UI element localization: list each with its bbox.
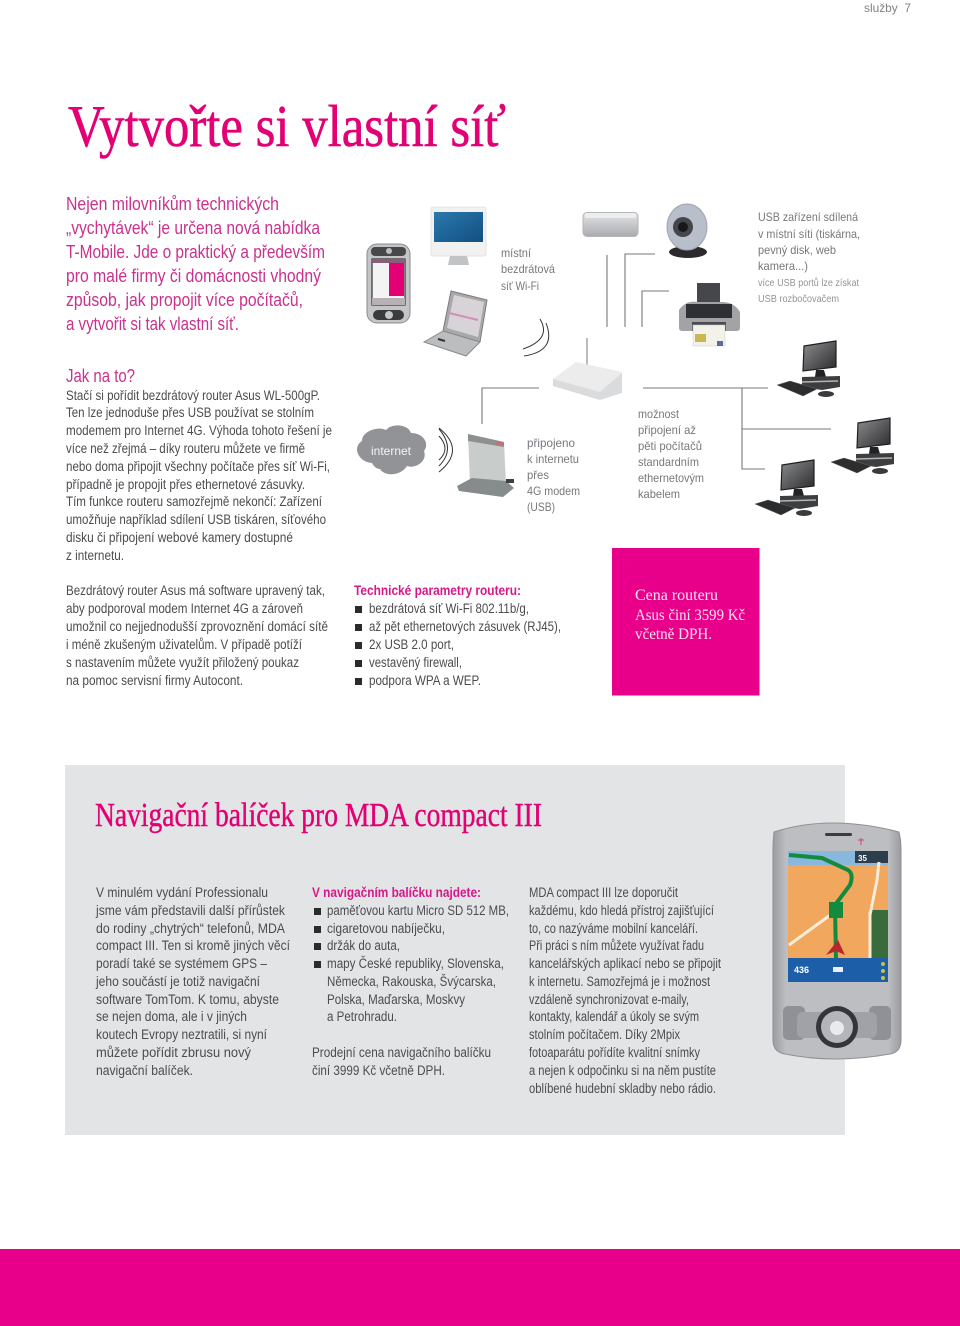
label: shared USB devices: USB rozbočovačem: [758, 293, 839, 305]
text column 2: package contents: cigaretovou nabíječku,: [327, 921, 445, 936]
text column 3: kontakty, kalendář a úkoly se svým: [529, 1009, 699, 1024]
body text: router software: umožnil co nejjednodušší zprovoznění domácí sítě: [66, 619, 328, 634]
label: ethernet connection: možnost: [638, 407, 680, 421]
text column 1: jeho součástí je totiž navigační: [95, 974, 260, 989]
text column 1: navigační balíček.: [96, 1063, 193, 1078]
text column 1: poradí také se systémem GPS –: [96, 956, 267, 971]
text column 2: package contents: mapy České republiky, Slovenska,: [327, 956, 504, 971]
body text: router software: s nastavením můžete využít přiložený poukaz: [66, 655, 299, 670]
body text: router software: Bezdrátový router Asus má software upravený tak,: [66, 583, 325, 598]
text column 3: fotoaparátu pořídíte kvalitní snímky: [529, 1045, 700, 1060]
text column 2: package contents: paměťovou kartu Micro SD 512 MB,: [327, 903, 509, 918]
body text: how it works: modemem pro Internet 4G. Výhoda tohoto řešení je: [66, 423, 332, 438]
network diagram: [357, 204, 894, 516]
body text: how it works: případně je propojit přes ethernetové zásuvky.: [66, 477, 305, 492]
icon: laptop: [424, 291, 487, 356]
panel: technical parameters: bezdrátová síť Wi-Fi 802.11b/g,: [369, 601, 529, 616]
icon: 4G modem on stand: [457, 434, 514, 497]
text column 1: do rodiny „chytrých“ telefonů, MDA: [96, 921, 285, 936]
label: connected via 4G modem: přes: [527, 468, 549, 482]
label: ethernet connection: [638, 407, 704, 501]
text column 1: [95, 885, 290, 1078]
callout: router price: Cena routeru: [635, 587, 718, 604]
label: local wireless network: [501, 246, 555, 293]
text column 2: package contents: Polska, Maďarska, Moskvy: [327, 992, 465, 1007]
icon: Mac mini disk: [583, 212, 638, 236]
icon: printer: [679, 283, 740, 346]
label: shared USB devices: USB zařízení sdílená: [758, 210, 858, 224]
icon: wireless router: [553, 338, 622, 400]
panel: technical parameters: vestavěný firewall,: [369, 655, 462, 670]
body text: how it works: více než zřejmá – díky routeru můžete ve firmě: [66, 441, 305, 456]
callout: router price: Asus činí 3599 Kč: [635, 607, 745, 624]
body text: how it works: nebo doma připojit všechny počítače přes síť Wi-Fi,: [66, 459, 330, 474]
body text: how it works: z internetu.: [66, 548, 124, 563]
label: shared USB devices: pevný disk, web: [758, 243, 836, 257]
text column 3: k internetu. Samozřejmá je i možnost: [529, 974, 710, 989]
text column 2: package contents: Německa, Rakouska, Švýcarska,: [327, 974, 496, 989]
icon: computer 1: [777, 341, 840, 397]
text column 1: můžete pořídit zbrusu nový: [96, 1045, 251, 1060]
label: connected via 4G modem: 4G modem: [527, 484, 580, 498]
connector lines: router to computers: [643, 388, 831, 469]
icon: internet cloud: internet: [371, 444, 412, 458]
body text: router software: i méně zkušeným uživatelům. V případě potíží: [66, 637, 302, 652]
panel: navigation package: [65, 765, 845, 1135]
text column 2: package contents: držák do auta,: [327, 938, 400, 953]
intro text: způsob, jak propojit více počítačů,: [66, 290, 303, 310]
label: ethernet connection: pěti počítačů: [638, 439, 702, 453]
label: local wireless network: místní: [501, 246, 532, 260]
text column 1: V minulém vydání Professionalu: [96, 885, 268, 900]
label: local wireless network: síť Wi-Fi: [501, 279, 539, 293]
label: ethernet connection: kabelem: [638, 487, 680, 501]
body text: router software: aby podporoval modem Internet 4G a zároveň: [66, 601, 303, 616]
callout: router price: včetně DPH.: [635, 626, 712, 643]
icon: computer 3: [755, 460, 818, 516]
icon: web camera: [667, 204, 707, 258]
intro text: pro malé firmy či domácnosti vhodný: [66, 266, 322, 286]
text column 3: Při práci s ním můžete využívat řadu: [529, 938, 704, 953]
text column 3: a nejen k odpočinku si na něm pustíte: [529, 1063, 716, 1078]
label: local wireless network: bezdrátová: [501, 262, 555, 276]
body text: how it works: [66, 388, 332, 563]
text column 3: [529, 885, 721, 1096]
panel: technical parameters: Technické parametry routeru:: [354, 583, 521, 598]
icon: wifi waves: [523, 319, 549, 356]
label: connected via 4G modem: připojeno: [527, 436, 575, 450]
subheading: Jak na to?: Jak na to?: [66, 366, 135, 386]
callout: router price: [612, 548, 760, 696]
page header: section and page number: služby 7: [864, 1, 911, 15]
panel: technical parameters: 2x USB 2.0 port,: [369, 637, 454, 652]
text column 3: kancelářských aplikací nebo se připojit: [529, 956, 721, 971]
intro text: [66, 194, 325, 334]
label: connected via 4G modem: [527, 436, 580, 514]
text column 3: vzdáleně synchronizovat e-maily,: [529, 992, 689, 1007]
text column 3: každému, kdo hledá přístroj zajišťující: [529, 903, 714, 918]
title: Vytvořte si vlastní síť: [68, 93, 506, 159]
panel: technical parameters: [354, 583, 561, 688]
label: shared USB devices: více USB portů lze získat: [758, 277, 859, 289]
body text: how it works: Tím funkce routeru samozřejmě nekončí: Zařízení: [66, 494, 322, 509]
intro text: „vychytávek“ je určena nová nabídka: [66, 218, 321, 238]
text column 1: jsme vám představili další přírůstek: [95, 903, 285, 918]
label: shared USB devices: kamera...): [758, 259, 808, 273]
label: ethernet connection: připojení až: [638, 423, 696, 437]
text column 2: package contents: Prodejní cena navigačního balíčku: [312, 1045, 491, 1060]
text column 3: to, co nazýváme mobilní kanceláří.: [529, 921, 698, 936]
text column 2: package contents: a Petrohradu.: [327, 1009, 397, 1024]
text column 3: stolním počítačem. Díky 2Mpix: [529, 1027, 680, 1042]
icon: MDA compact III phone with navigation: 436: [794, 965, 809, 975]
text column 3: oblíbené hudební skladby nebo rádio.: [529, 1081, 716, 1096]
icon: PDA: [367, 244, 410, 323]
label: ethernet connection: ethernetovým: [638, 471, 704, 485]
text column 1: se nejen doma, ale i v jiných: [96, 1009, 247, 1024]
icon: MDA compact III phone with navigation: 35: [858, 854, 867, 863]
panel: technical parameters: až pět ethernetových zásuvek (RJ45),: [369, 619, 561, 634]
text column 2: package contents: činí 3999 Kč včetně DPH.: [312, 1063, 445, 1078]
label: shared USB devices: [758, 210, 860, 305]
text column 1: koutech Evropy neztratili, si nyní: [96, 1027, 267, 1042]
text column 2: package contents: V navigačním balíčku najdete:: [312, 885, 481, 900]
connector lines: USB devices: [607, 254, 669, 327]
intro text: T-Mobile. Jde o praktický a především: [66, 242, 325, 262]
label: connected via 4G modem: (USB): [527, 500, 555, 514]
intro text: Nejen milovníkům technických: [66, 194, 279, 214]
label: shared USB devices: v místní síti (tiskárna,: [758, 227, 860, 241]
icon: internet cloud: [357, 425, 426, 474]
connector lines: router to modem: [482, 388, 539, 424]
icon: MDA compact III phone with navigation: [773, 823, 901, 1059]
body text: how it works: Ten lze jednoduše přes USB používat se stolním: [66, 405, 314, 420]
panel: technical parameters: podpora WPA a WEP.: [369, 673, 481, 688]
footer band: [0, 1249, 960, 1326]
label: connected via 4G modem: k internetu: [527, 452, 579, 466]
intro text: a vytvořit si tak vlastní síť.: [66, 314, 239, 334]
body text: router software: [66, 583, 328, 688]
body text: how it works: Stačí si pořídit bezdrátový router Asus WL-500gP.: [66, 388, 320, 403]
body text: router software: na pomoc servisní firmy Autocont.: [66, 673, 243, 688]
heading: navigation package: Navigační balíček pro MDA compact III: [95, 797, 542, 834]
icon: computer 2: [831, 418, 894, 474]
label: ethernet connection: standardním: [638, 455, 699, 469]
icon: signal waves: [439, 428, 452, 472]
text column 3: MDA compact III lze doporučit: [529, 885, 678, 900]
text column 1: compact III. Ten si kromě jiných věcí: [96, 938, 290, 953]
text column 1: software TomTom. K tomu, abyste: [96, 992, 279, 1007]
icon: desktop iMac: [431, 207, 486, 265]
body text: how it works: umožňuje například sdílení USB tiskáren, síťového: [66, 512, 326, 527]
body text: how it works: disku či připojení webové kamery dostupné: [66, 530, 293, 545]
text column 2: package contents: [312, 885, 509, 1078]
